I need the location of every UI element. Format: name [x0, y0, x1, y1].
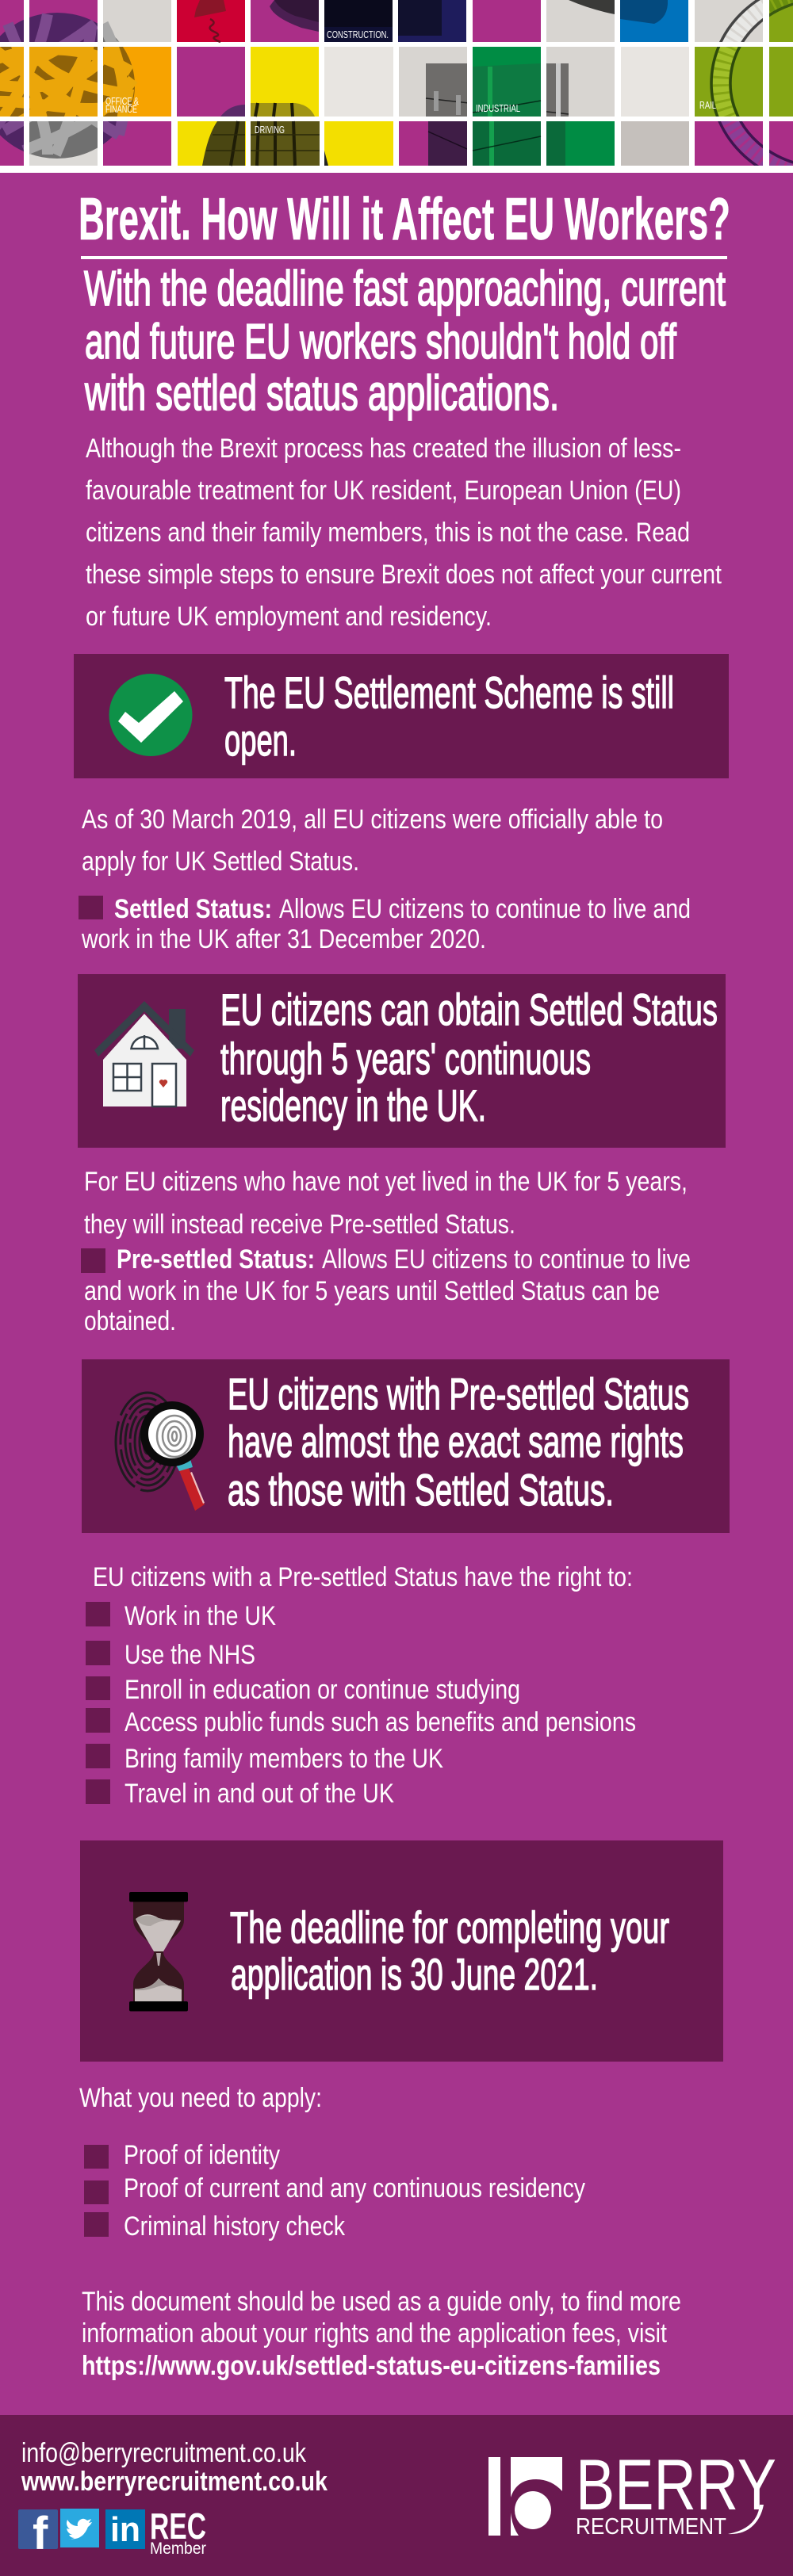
- header image: sector tile grid: [0, 0, 793, 186]
- intro paragraph: or future UK employment and residency.: [86, 602, 492, 632]
- subtitle: with settled status applications.: [84, 366, 559, 421]
- icon: facebook: f: [33, 2508, 48, 2559]
- text: rights list: [86, 1562, 636, 1809]
- text: pre-settled status details: they will instead receive Pre-settled Status.: [84, 1210, 515, 1240]
- bullet: residency: Proof of current and any continuous residency: [124, 2173, 585, 2203]
- sector labels: [105, 29, 716, 136]
- work boot: [270, 0, 442, 36]
- text: settlement scheme details: Settled Status:: [114, 894, 272, 924]
- tile row 3: [0, 121, 793, 166]
- text: what you need to apply: What you need to apply:: [79, 2083, 322, 2113]
- panel: pre-settled rights: [82, 1359, 730, 1533]
- Berry Recruitment logo: RECRUITMENT: [576, 2514, 726, 2540]
- text: pre-settled status details: obtained.: [84, 1306, 176, 1336]
- railway track: [711, 0, 793, 186]
- bullet: NHS: [86, 1640, 255, 1670]
- panel heading: open.: [224, 715, 297, 765]
- intro paragraph: citizens and their family members, this is not the case. Read: [86, 518, 690, 548]
- bullet: work: Work in the UK: [125, 1601, 276, 1631]
- sector labels: FINANCE: [105, 104, 137, 115]
- contact details: info@berryrecruitment.co.uk: [21, 2438, 307, 2468]
- sector labels: DRIVING: [255, 124, 285, 136]
- icon: green check mark: [109, 674, 192, 756]
- panel heading: [228, 1369, 689, 1515]
- text: settlement scheme details: [79, 805, 691, 954]
- panel heading: residency in the UK.: [220, 1080, 486, 1130]
- text: guidance note with link: [82, 2287, 681, 2381]
- text: settlement scheme details: work in the UK after 31 December 2020.: [81, 924, 486, 954]
- icon: facebook: [18, 2508, 58, 2559]
- Berry Recruitment logo: [488, 2445, 776, 2540]
- title underline: [81, 256, 727, 259]
- text: pre-settled status details: For EU citizens who have not yet lived in the UK for 5 years,: [84, 1167, 688, 1197]
- text: pre-settled status details: Allows EU citizens to continue to live: [322, 1244, 691, 1275]
- sector labels: OFFICE &: [105, 96, 139, 107]
- REC member badge: REC: [150, 2505, 206, 2547]
- text: pre-settled status details: Pre-settled Status:: [117, 1244, 315, 1275]
- footer band: [0, 2415, 793, 2576]
- panel: five years continuous residency: [78, 974, 726, 1148]
- sector labels: INDUSTRIAL: [476, 103, 520, 114]
- panel heading: [230, 1902, 669, 1999]
- panel: settlement scheme still open: [74, 654, 729, 778]
- icon: linkedin: in: [110, 2510, 140, 2549]
- icon: fingerprint and magnifying glass: [116, 1393, 205, 1511]
- bullet: work: [86, 1601, 276, 1631]
- intro paragraph: favourable treatment for UK resident, European Union (EU): [86, 476, 681, 506]
- panel: deadline: [80, 1840, 723, 2062]
- text: settlement scheme details: apply for UK Settled Status.: [82, 847, 359, 877]
- bullet: [79, 896, 103, 919]
- bullet: identity: [84, 2140, 280, 2170]
- text: settlement scheme details: As of 30 March 2019, all EU citizens were officially able to: [82, 805, 663, 835]
- subtitle: [84, 262, 726, 421]
- panel heading: as those with Settled Status.: [228, 1465, 614, 1515]
- intro paragraph: Although the Brexit process has created the illusion of less-: [86, 434, 681, 464]
- bullet: [81, 1248, 105, 1273]
- panel heading: [224, 667, 674, 765]
- rubber band ball: [0, 13, 135, 159]
- tile row 2: [0, 47, 793, 117]
- text: pre-settled status details: and work in the UK for 5 years until Settled Status can be: [84, 1276, 660, 1306]
- panel heading: application is 30 June 2021.: [231, 1949, 598, 1999]
- tile row 1: [0, 0, 793, 42]
- REC member badge: Member: [150, 2540, 206, 2558]
- bullet: identity: Proof of identity: [124, 2140, 280, 2170]
- intro paragraph: [86, 434, 722, 632]
- bullet: travel: Travel in and out of the UK: [125, 1779, 394, 1809]
- contact details: [21, 2438, 328, 2497]
- text: guidance note with link: information about your rights and the application fees, visit: [82, 2318, 667, 2349]
- sector labels: CONSTRUCTION.: [327, 29, 389, 40]
- tyre: [202, 103, 328, 166]
- text: rights list: EU citizens with a Pre-settled Status have the right to:: [93, 1562, 633, 1592]
- text: guidance note with link: This document should be used as a guide only, to find more: [82, 2287, 681, 2317]
- shoe fragments: [569, 0, 668, 24]
- panel heading: [220, 984, 718, 1130]
- text: settlement scheme details: Allows EU citizens to continue to live and: [279, 894, 691, 924]
- icon: twitter: [60, 2509, 99, 2547]
- bullet: NHS: Use the NHS: [125, 1640, 255, 1670]
- sector labels: RAIL: [699, 100, 716, 111]
- text: pre-settled status details: [81, 1167, 691, 1336]
- bullet: public funds: Access public funds such as benefits and pensions: [125, 1707, 636, 1737]
- bullet: family: Bring family members to the UK: [125, 1744, 443, 1774]
- bullet: criminal history: Criminal history check: [124, 2211, 346, 2242]
- icon: house: [94, 1001, 194, 1106]
- REC member badge: [150, 2505, 206, 2558]
- contact details: www.berryrecruitment.co.uk: [21, 2467, 328, 2497]
- text: what you need to apply: [79, 2083, 585, 2242]
- text: guidance note with link: https://www.gov.uk/settled-status-eu-citizens-families: [82, 2351, 661, 2381]
- panel heading: through 5 years' continuous: [220, 1034, 591, 1084]
- bullet: education: Enroll in education or continue studying: [125, 1675, 520, 1705]
- icon: hourglass: [129, 1892, 188, 2012]
- iron and cord: [194, 0, 226, 42]
- cardboard boxes: [426, 63, 569, 166]
